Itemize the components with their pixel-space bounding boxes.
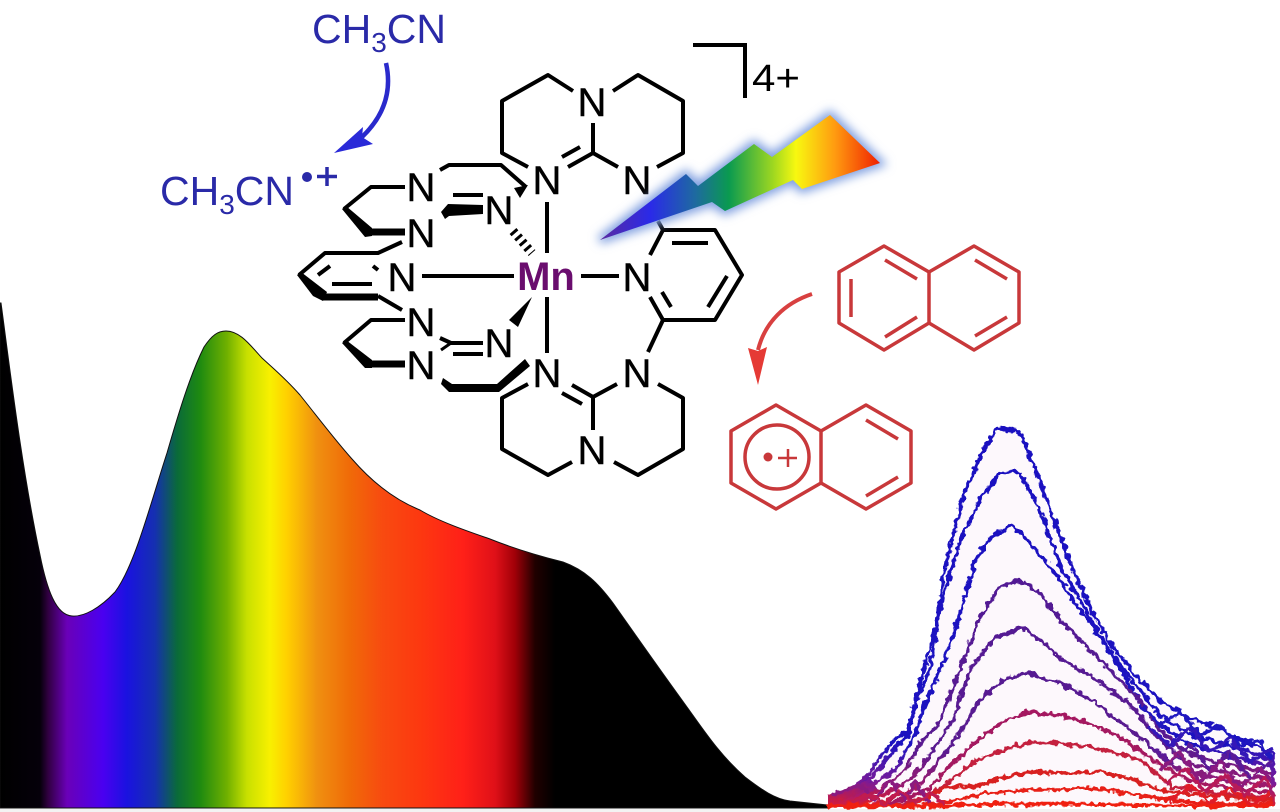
- acetonitrile radical cation label: CN: [235, 168, 294, 214]
- nitrogen labels: N: [533, 159, 561, 203]
- curve 10: [920, 788, 1273, 806]
- nitrogen labels: N: [623, 159, 651, 203]
- nitrogen labels: [388, 81, 651, 473]
- acetonitrile label: CN: [387, 6, 446, 52]
- tangled right tail: [1140, 705, 1273, 762]
- left back pyridine ring: [297, 242, 402, 310]
- curve 6: [870, 673, 1273, 806]
- absorption spectrum with rainbow fill: [0, 303, 827, 808]
- charge bracket 4+: 4+: [752, 58, 800, 100]
- lower back guanidine ligand: [342, 297, 532, 392]
- nitrogen labels: N: [623, 352, 651, 396]
- curve 9: [905, 772, 1273, 806]
- bottom guanidine ligand: [502, 384, 683, 475]
- manganese label: Mn: [517, 255, 575, 299]
- nitrogen labels: N: [407, 212, 435, 256]
- curve 1 (highest, blue): [828, 428, 1273, 797]
- nitrogen labels: N: [578, 81, 606, 125]
- nitrogen labels: N: [407, 301, 435, 345]
- curve 5: [860, 627, 1273, 805]
- upper back guanidine ligand: [342, 165, 532, 253]
- naphthalene radical cation: [731, 405, 911, 509]
- naphthalene: [839, 246, 1019, 350]
- nitrogen labels: N: [485, 189, 513, 233]
- curve 11: [828, 804, 1273, 806]
- acetonitrile radical cation label: 3: [219, 189, 235, 220]
- molecule: manganese complex: [297, 75, 742, 475]
- tangled left foot: [832, 780, 930, 804]
- curve 8: [895, 743, 1273, 806]
- acetonitrile label: 3: [371, 27, 387, 58]
- nitrogen labels: N: [388, 256, 416, 300]
- transient emission spectra: [828, 428, 1273, 807]
- curve 7: [885, 712, 1273, 806]
- nitrogen labels: N: [533, 352, 561, 396]
- top guanidine ligand: [502, 75, 683, 167]
- rainbow lightning bolt: [600, 115, 880, 240]
- nitrogen labels: N: [623, 256, 651, 300]
- curve 3: [835, 525, 1273, 802]
- nitrogen labels: N: [578, 429, 606, 473]
- nitrogen labels: N: [407, 344, 435, 388]
- right pyridine ring: [648, 221, 742, 352]
- acetonitrile radical cation label: [160, 167, 337, 220]
- nitrogen labels: N: [485, 322, 513, 366]
- acetonitrile label: CH: [312, 6, 371, 52]
- right edge: [1271, 752, 1275, 806]
- arrow: acetonitrile oxidation: [334, 63, 388, 153]
- curve 4: [845, 580, 1273, 804]
- arrow: naphthalene oxidation: [748, 294, 812, 385]
- curve 2: [828, 472, 1273, 800]
- bonds to manganese: [422, 202, 619, 353]
- nitrogen labels: N: [407, 166, 435, 210]
- charge bracket 4+: [693, 45, 800, 100]
- acetonitrile radical cation label: CH: [160, 168, 219, 214]
